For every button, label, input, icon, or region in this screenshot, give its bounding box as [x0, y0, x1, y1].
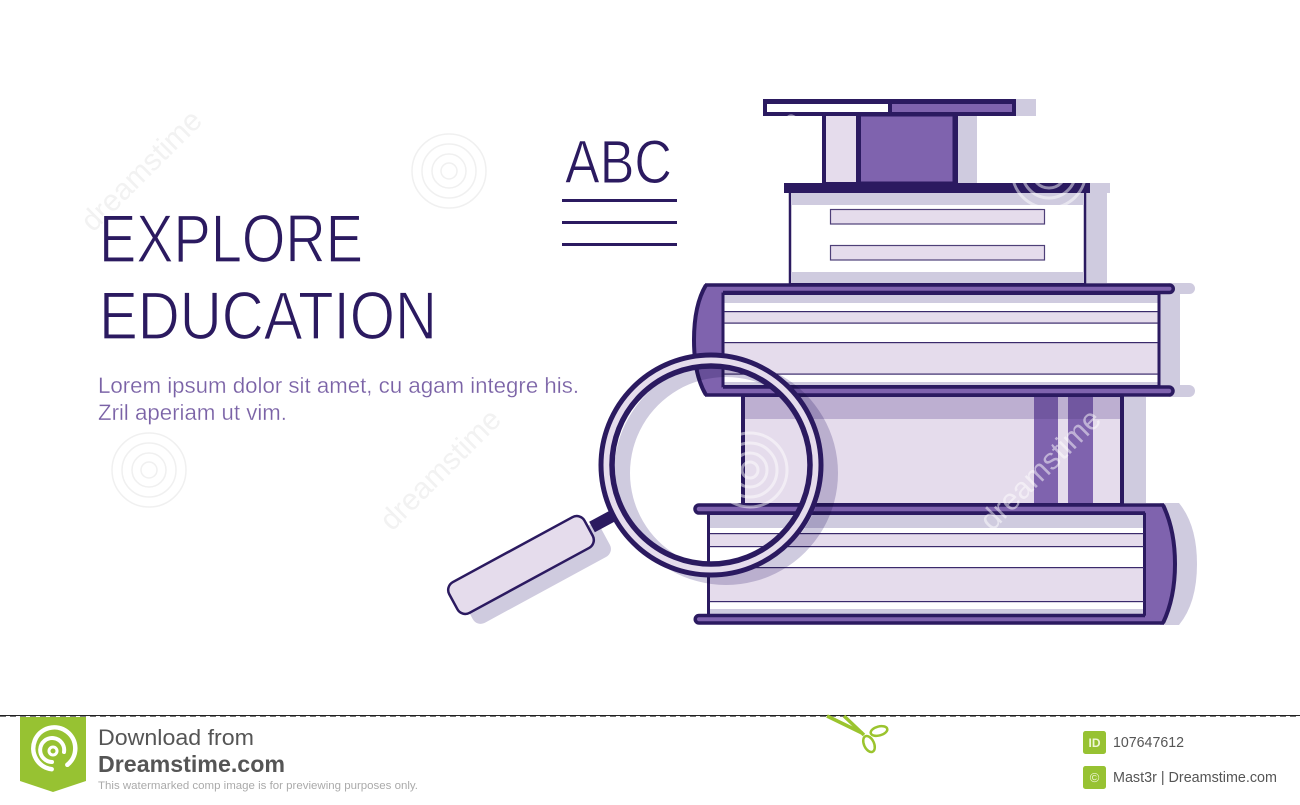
- icon: abc with text lines: ABC: [565, 128, 672, 196]
- copyright credit: ©: [1090, 770, 1100, 785]
- icon: green scissors: [827, 716, 888, 754]
- watermarks over the illustration: dreamstime: [675, 104, 809, 238]
- icon: abc with text lines: [562, 128, 677, 246]
- watermarks on white background: dreamstime: [75, 104, 209, 238]
- watermarks on white background: [75, 104, 508, 537]
- text block: lorem ipsum subtitle: Zril aperiam ut vim.: [98, 400, 287, 425]
- text: download from dreamstime: Dreamstime.com: [98, 751, 285, 777]
- image id: [1083, 731, 1184, 754]
- copyright credit: Mast3r | Dreamstime.com: [1113, 770, 1277, 786]
- text: download from dreamstime: Download from: [98, 725, 254, 750]
- logo: dreamstime green badge: [20, 717, 86, 792]
- handle: [445, 513, 597, 617]
- magnifier shadow: [460, 361, 838, 627]
- illustration: stack of books: [694, 99, 1197, 625]
- icon: magnifying glass: [445, 355, 838, 627]
- handle connector: [592, 513, 618, 527]
- book 3: large book with left spine: [694, 285, 1173, 395]
- watermarks on white background: dreamstime: [374, 403, 508, 537]
- title: explore education: [99, 201, 437, 354]
- watermarks over the illustration: dreamstime: [974, 403, 1108, 537]
- lens ring: [601, 355, 821, 575]
- text: download from dreamstime: [98, 725, 418, 792]
- watermarks over the illustration: [675, 104, 1108, 537]
- text: download from dreamstime: This watermarked comp image is for previewing purposes only.: [98, 780, 418, 792]
- image id: ID: [1088, 736, 1101, 750]
- book 5: bottom book with right spine: [695, 505, 1175, 623]
- text block: lorem ipsum subtitle: [98, 373, 579, 425]
- copyright credit: [1083, 766, 1277, 789]
- image id: 107647612: [1113, 735, 1184, 751]
- text block: lorem ipsum subtitle: Lorem ipsum dolor sit amet, cu agam integre his.: [98, 373, 579, 398]
- title: explore education: EXPLORE: [99, 201, 363, 277]
- book 2: labelled book: [784, 183, 1090, 284]
- footer divider: dashed cut line: [0, 715, 1300, 716]
- book 1: top thin book: [763, 99, 1016, 184]
- book shadows: [957, 99, 1197, 625]
- title: explore education: EDUCATION: [99, 278, 437, 354]
- book 4: book with bookmark ribbons: [743, 395, 1122, 505]
